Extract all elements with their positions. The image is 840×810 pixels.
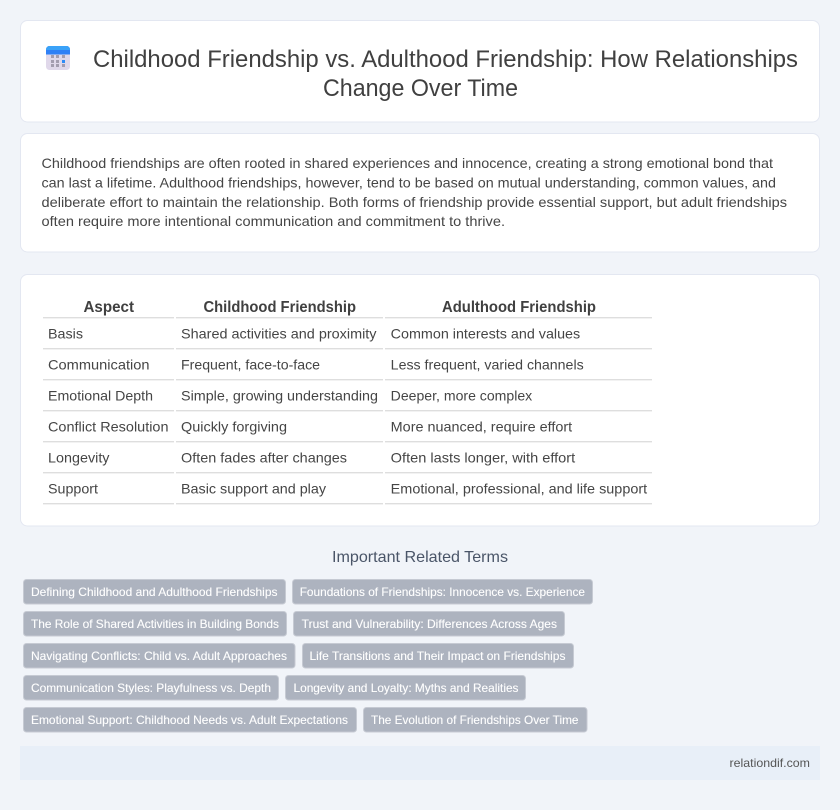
footer: relationdif.com bbox=[730, 756, 810, 770]
tag: Emotional Support: Childhood Needs vs. Adult Expectations bbox=[31, 713, 348, 727]
tag bbox=[364, 708, 587, 732]
table row: Conflict Resolution: Quickly forgiving bbox=[181, 418, 287, 434]
table row: Communication: Frequent, face-to-face bbox=[181, 356, 320, 372]
text block: introduction paragraph: Childhood friendships are often rooted in shared experiences and innocence, creating a strong emotional bond that bbox=[42, 155, 773, 171]
tag: Defining Childhood and Adulthood Friendships bbox=[31, 585, 278, 599]
table row: Basis bbox=[48, 326, 580, 342]
table row: Conflict Resolution: Conflict Resolution bbox=[48, 418, 168, 434]
table row: Longevity: Longevity bbox=[48, 450, 110, 466]
table row: Basis: Shared activities and proximity bbox=[181, 326, 376, 342]
tag: The Evolution of Friendships Over Time bbox=[371, 713, 579, 727]
table row: Communication: Less frequent, varied channels bbox=[391, 356, 584, 372]
table row: Conflict Resolution: More nuanced, require effort bbox=[391, 418, 572, 434]
table row: Longevity bbox=[48, 450, 575, 466]
tag bbox=[24, 676, 278, 700]
tag bbox=[24, 644, 295, 668]
table row: Conflict Resolution bbox=[48, 418, 572, 434]
table row: Basis: Common interests and values bbox=[391, 326, 580, 342]
title: Childhood Friendship vs. Adulthood Friendship: How Relationships bbox=[93, 46, 798, 73]
tag: Longevity and Loyalty: Myths and Realities bbox=[294, 681, 518, 695]
tag: The Role of Shared Activities in Building Bonds bbox=[31, 617, 279, 631]
title bbox=[93, 46, 798, 102]
tag bbox=[294, 612, 564, 636]
tag: Navigating Conflicts: Child vs. Adult Approaches bbox=[31, 649, 287, 663]
panel: introduction bbox=[20, 134, 820, 252]
footer bbox=[20, 746, 820, 780]
table row: Support: Emotional, professional, and life support bbox=[391, 480, 647, 496]
table header row: Adulthood Friendship bbox=[442, 299, 596, 316]
tag bbox=[24, 708, 356, 732]
tag: Foundations of Friendships: Innocence vs. Experience bbox=[300, 585, 585, 599]
tag bbox=[292, 580, 592, 604]
table header row bbox=[84, 299, 596, 316]
panel: related term tags bbox=[24, 580, 592, 732]
heading: important related terms: Important Related Terms bbox=[332, 549, 508, 566]
table header row: Aspect bbox=[84, 299, 135, 316]
text block: introduction paragraph: often require more intentional communication and commitment to thrive. bbox=[42, 213, 505, 229]
table row: Basis: Basis bbox=[48, 326, 83, 342]
table row: Support: Support bbox=[48, 480, 98, 496]
text block: introduction paragraph: can last a lifetime. Adulthood friendships, however, tend to be based on mutual understanding, common values, and bbox=[42, 174, 776, 190]
table row: Longevity: Often fades after changes bbox=[181, 450, 347, 466]
table row: Communication: Communication bbox=[48, 356, 150, 372]
tag: Communication Styles: Playfulness vs. Depth bbox=[31, 681, 271, 695]
table row: Emotional Depth bbox=[48, 388, 532, 404]
table row: Emotional Depth: Deeper, more complex bbox=[391, 388, 532, 404]
table header row: Childhood Friendship bbox=[204, 299, 356, 316]
tag: Life Transitions and Their Impact on Friendships bbox=[310, 649, 566, 663]
panel: header card bbox=[20, 20, 820, 122]
title: Change Over Time bbox=[323, 75, 518, 102]
table row: Support: Basic support and play bbox=[181, 480, 326, 496]
icon: calendar bbox=[46, 46, 70, 70]
table row: Emotional Depth: Emotional Depth bbox=[48, 388, 153, 404]
tag bbox=[286, 676, 526, 700]
tag: Trust and Vulnerability: Differences Across Ages bbox=[302, 617, 557, 631]
tag bbox=[24, 612, 286, 636]
text block: introduction paragraph: deliberate effort to maintain the relationship. Both forms of friendship provide essential support, but adult friendships bbox=[42, 194, 787, 210]
table row: Longevity: Often lasts longer, with effort bbox=[391, 450, 575, 466]
tag bbox=[24, 580, 286, 604]
table row: Emotional Depth: Simple, growing understanding bbox=[181, 388, 378, 404]
tag bbox=[302, 644, 574, 668]
text block: introduction paragraph bbox=[42, 155, 787, 229]
table row: Support bbox=[48, 480, 647, 496]
table row: Communication bbox=[48, 356, 584, 372]
panel: comparison table bbox=[20, 274, 820, 526]
